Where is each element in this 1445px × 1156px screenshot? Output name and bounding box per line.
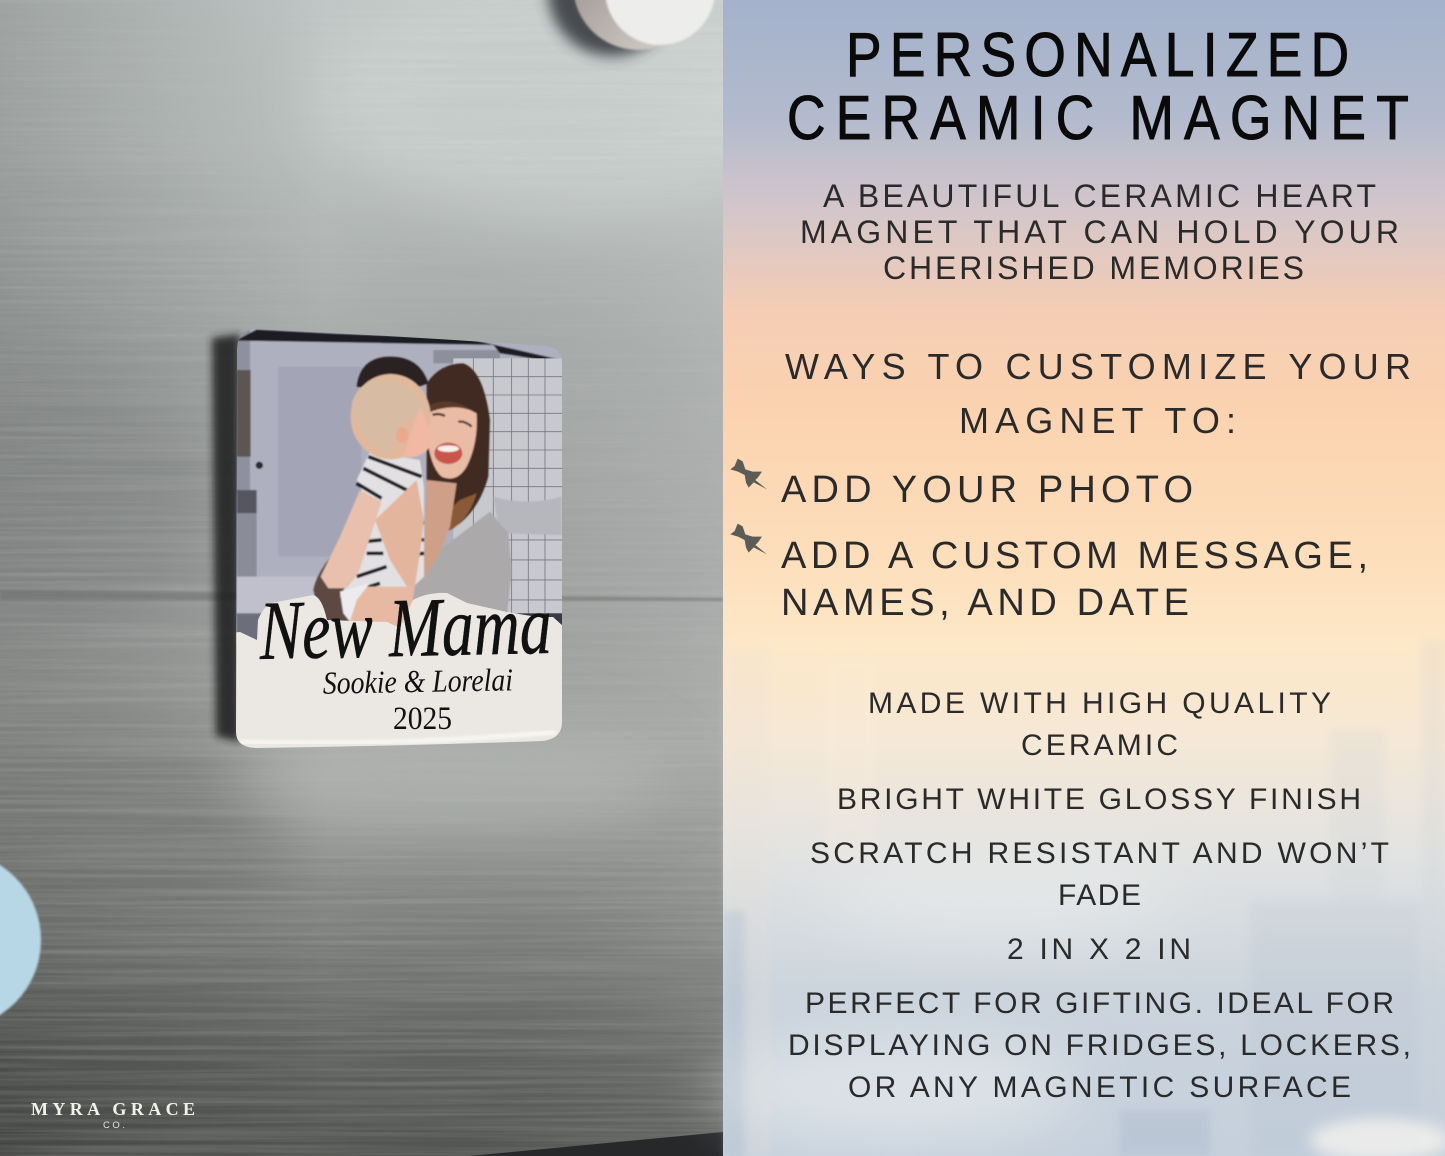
feature: gifting: OR ANY MAGNETIC SURFACE	[848, 1071, 1351, 1104]
thickness highlight at edge	[240, 732, 556, 743]
shadow of photo magnet	[212, 334, 240, 742]
icon: blue round magnet at left edge	[0, 851, 41, 1029]
dark clothing behind	[312, 558, 350, 621]
baby's onesie	[340, 452, 424, 597]
white caption area	[236, 592, 562, 748]
feature list	[788, 687, 1411, 1104]
icon: push pin 2	[730, 524, 767, 554]
panel: sunset sky background	[720, 0, 1445, 1156]
feature: scratch resistant	[810, 837, 1389, 912]
woman's hand and arm	[375, 480, 424, 597]
logo: Myra Grace Co.: CO.	[103, 1120, 125, 1131]
feature: glossy finish: BRIGHT WHITE GLOSSY FINISH	[837, 783, 1361, 816]
photo	[233, 327, 567, 643]
figures	[313, 357, 512, 640]
intro text: MAGNET THAT CAN HOLD YOUR	[800, 214, 1399, 250]
icon: push pin 1	[730, 459, 767, 489]
feature: gifting: PERFECT FOR GIFTING. IDEAL FOR	[805, 987, 1394, 1020]
baby's head	[351, 374, 431, 459]
intro text: A BEAUTIFUL CERAMIC HEART	[823, 178, 1376, 214]
panel: brushed steel fridge door	[0, 0, 800, 1156]
feature: scratch resistant: SCRATCH RESISTANT AND WON’T	[810, 837, 1389, 870]
intro text: CHERISHED MEMORIES	[883, 250, 1304, 286]
logo: Myra Grace Co.: MYRA GRACE	[31, 1099, 195, 1119]
room background	[233, 327, 567, 643]
heading	[787, 21, 1409, 153]
woman's neck and chest	[423, 480, 457, 580]
baby's dark hair	[357, 357, 428, 393]
grid cushion	[453, 358, 563, 643]
feature: scratch resistant: FADE	[1058, 879, 1141, 912]
feature: size: 2 IN X 2 IN	[1007, 933, 1191, 966]
section heading: ways to customize	[785, 346, 1411, 441]
feature: ceramic: MADE WITH HIGH QUALITY	[868, 687, 1331, 720]
caption: names: Sookie & Lorelai	[323, 661, 513, 701]
section heading: ways to customize: WAYS TO CUSTOMIZE YOUR	[785, 346, 1411, 387]
woman's face	[427, 404, 477, 479]
title line 2: CERAMIC MAGNET	[787, 84, 1409, 153]
intro text	[800, 178, 1399, 286]
caption: New Mama: New Mama	[258, 579, 552, 678]
woman's sweater	[413, 512, 512, 620]
baby's leg and diaper	[350, 587, 413, 630]
feature: ceramic	[868, 687, 1331, 762]
panel: photo magnet	[225, 327, 567, 760]
feature: gifting: DISPLAYING ON FRIDGES, LOCKERS,	[788, 1029, 1411, 1062]
feature: gifting	[788, 987, 1411, 1104]
section heading: ways to customize: MAGNET TO:	[959, 400, 1236, 441]
baby's arm	[321, 490, 382, 588]
bullet: add your photo: ADD YOUR PHOTO	[781, 469, 1193, 511]
woman's hair	[427, 363, 490, 538]
logo: Myra Grace Co.	[31, 1099, 195, 1131]
bullet: add a custom message: NAMES, AND DATE	[781, 582, 1189, 624]
bullet: add a custom message: ADD A CUSTOM MESSAGE,	[781, 535, 1368, 577]
icon: white round magnet at top	[548, 0, 715, 56]
title line 1: PERSONALIZED	[846, 21, 1349, 90]
bullet: add a custom message	[781, 535, 1368, 624]
caption: year: 2025	[393, 701, 452, 737]
feature: ceramic: CERAMIC	[1021, 729, 1178, 762]
